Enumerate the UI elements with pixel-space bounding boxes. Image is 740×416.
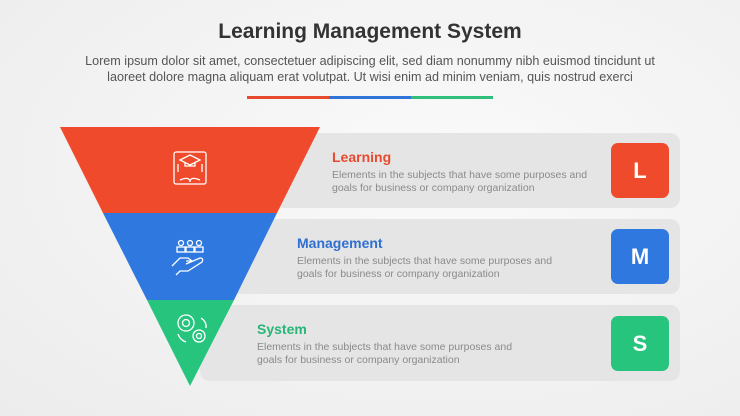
badge L: L [633,158,647,182]
text: Elements in the subjects that have some purposes and goals for business or company organization [332,169,587,194]
text: System [257,321,307,337]
text: Learning [332,149,391,165]
icon: gears [178,315,206,342]
subtitle: Lorem ipsum dolor sit amet, consectetuer adipiscing elit, sed diam nonummy nibh euismod tincidunt ut [85,54,655,68]
panel: management [200,219,680,294]
badge S: S [633,330,647,356]
text: learning [332,149,587,194]
badge M: M [631,244,649,268]
badge S [611,316,669,371]
badge L [611,143,669,198]
icon: book [174,152,206,184]
text: Elements in the subjects that have some purposes and goals for business or company organization [297,255,552,280]
text: management [297,235,552,280]
panel: learning [200,133,680,208]
badge M [611,229,669,284]
subtitle [85,54,655,84]
divider [247,96,493,99]
icon: hand with people [172,240,203,275]
text: Elements in the subjects that have some purposes and goals for business or company organization [257,341,512,366]
panel: system [200,305,680,381]
title: Learning Management System [218,20,522,43]
subtitle: laoreet dolore magna aliquam erat volutpat. Ut wisi enim ad minim veniam, quis nostrud exerci [107,70,633,84]
text: system [257,321,512,366]
text: Management [297,235,383,251]
